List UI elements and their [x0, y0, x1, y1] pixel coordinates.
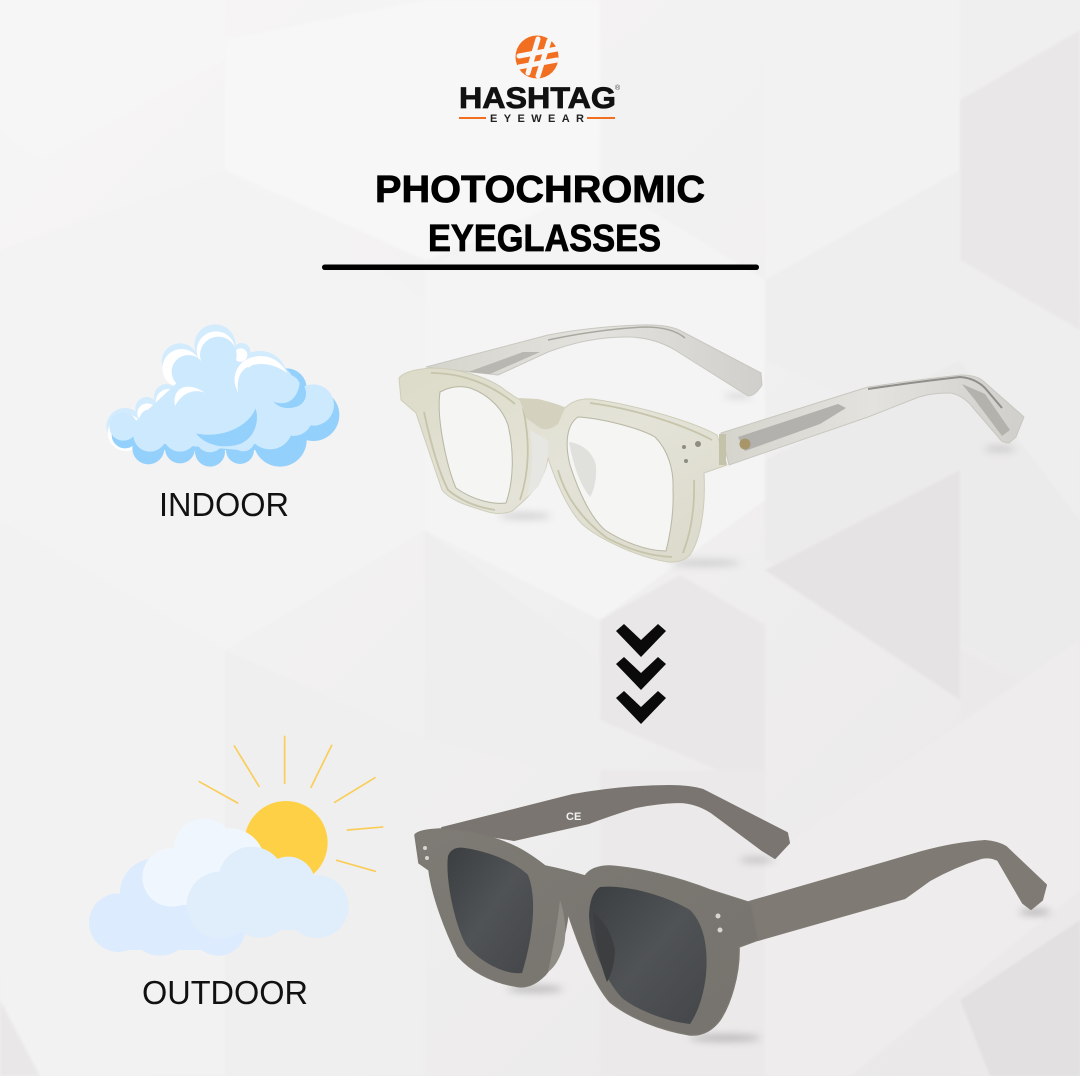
- rim highlights: [424, 373, 712, 557]
- lens right: [567, 417, 673, 551]
- nose pad reflection: [593, 912, 615, 982]
- sub wordmark: EYEWEAR: [490, 113, 584, 125]
- lens right: [589, 887, 707, 1024]
- far temple edge: [548, 327, 685, 340]
- far temple inlay: [468, 352, 540, 374]
- title: PHOTOCHROMIC: [375, 169, 705, 211]
- icon: hashtag badge: [516, 36, 558, 78]
- far temple: [426, 325, 762, 396]
- near temple: [721, 375, 1024, 465]
- icon: sun and clouds (outdoor): [89, 736, 383, 956]
- label: outdoor: OUTDOOR: [142, 974, 308, 1011]
- bridge: [519, 398, 565, 429]
- lens left: [447, 848, 533, 973]
- nose pad left: [548, 900, 565, 972]
- icon: cloud (indoor): [106, 324, 339, 467]
- glasses: darkened outdoor frames: [415, 786, 1051, 1041]
- hinge: [719, 434, 726, 465]
- title underline: [322, 264, 759, 270]
- near temple edge: [868, 377, 1002, 408]
- wordmark: HASHTAG: [459, 82, 616, 115]
- front frame: [415, 829, 758, 1035]
- sun: [244, 801, 328, 884]
- rivets: [423, 846, 722, 932]
- lens left: [439, 387, 512, 503]
- front cloud: [187, 847, 349, 938]
- top white cloud: [142, 818, 265, 907]
- temple print: CE: [566, 811, 581, 823]
- nose pads: [569, 442, 596, 497]
- near temple tip shading: [962, 384, 1010, 436]
- main cloud body: [109, 337, 334, 452]
- pale outer crest: [106, 324, 287, 445]
- near temple: [749, 841, 1046, 940]
- registered mark: ®: [615, 84, 621, 92]
- nose pad left: [527, 430, 548, 497]
- glasses: clear indoor frames: [399, 325, 1024, 566]
- sun rays: [199, 736, 383, 871]
- ground shadows: [507, 858, 1051, 1041]
- rivets: [682, 441, 701, 463]
- logo: Hashtag Eyewear: [459, 36, 621, 125]
- shadow layer: [112, 368, 339, 467]
- cloud fold shadows: [196, 408, 257, 446]
- title: EYEGLASSES: [428, 218, 661, 260]
- title: [375, 169, 705, 260]
- temple emblem: [740, 438, 750, 450]
- white highlights: [108, 331, 287, 451]
- near temple inlay: [738, 404, 846, 451]
- icon: chevron arrows: [616, 624, 666, 724]
- far temple: [442, 786, 789, 858]
- back cloud: [89, 858, 246, 956]
- inner white crescents: [235, 356, 287, 393]
- label: indoor: INDOOR: [159, 486, 289, 523]
- ground shadows: [499, 394, 1016, 566]
- front frame: [399, 368, 727, 562]
